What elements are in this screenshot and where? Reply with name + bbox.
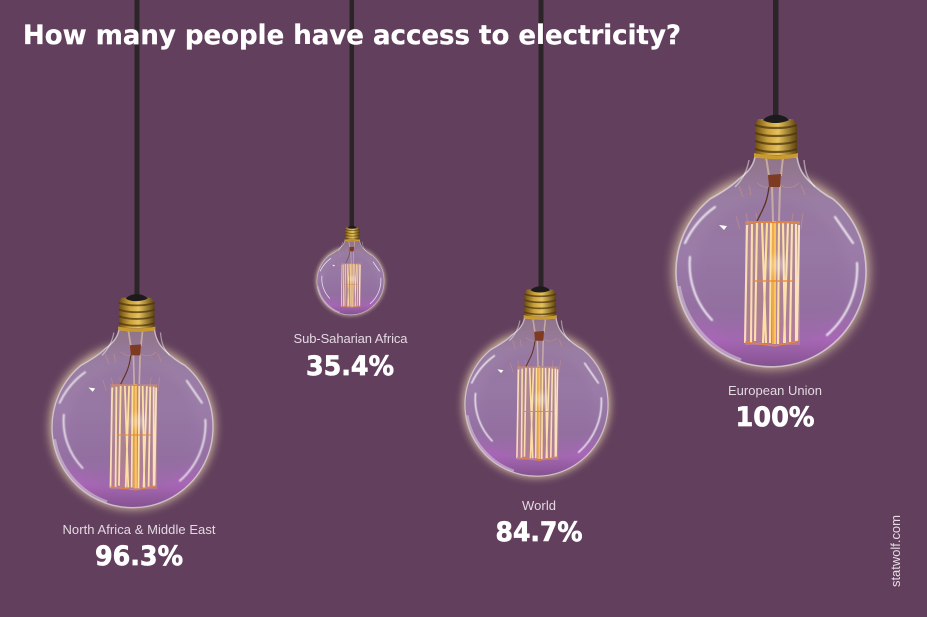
label: North Africa & Middle East <box>62 522 216 572</box>
label: Sub-Saharian Africa <box>294 331 408 382</box>
label: World <box>496 498 582 548</box>
bulb: European Union <box>674 0 868 368</box>
value: 100%: 100% <box>736 402 814 433</box>
label: Sub-Saharian Africa: Sub-Saharian Africa <box>294 331 408 346</box>
value: 84.7%: 84.7% <box>496 517 582 548</box>
credit: statwolf.com: statwolf.com <box>888 515 903 587</box>
label: European Union: European Union <box>728 383 822 398</box>
value: 96.3%: 96.3% <box>95 541 183 572</box>
label: North Africa & Middle East: North Africa & Middle East <box>62 522 216 537</box>
bulb: Sub-Saharian Africa <box>316 0 385 315</box>
label: European Union <box>728 383 822 433</box>
bulb: North Africa & Middle East <box>50 0 215 509</box>
label: World: World <box>522 498 556 513</box>
bulb: World <box>463 0 610 477</box>
value: 35.4%: 35.4% <box>306 351 394 382</box>
title: How many people have access to electricity? <box>23 20 681 51</box>
